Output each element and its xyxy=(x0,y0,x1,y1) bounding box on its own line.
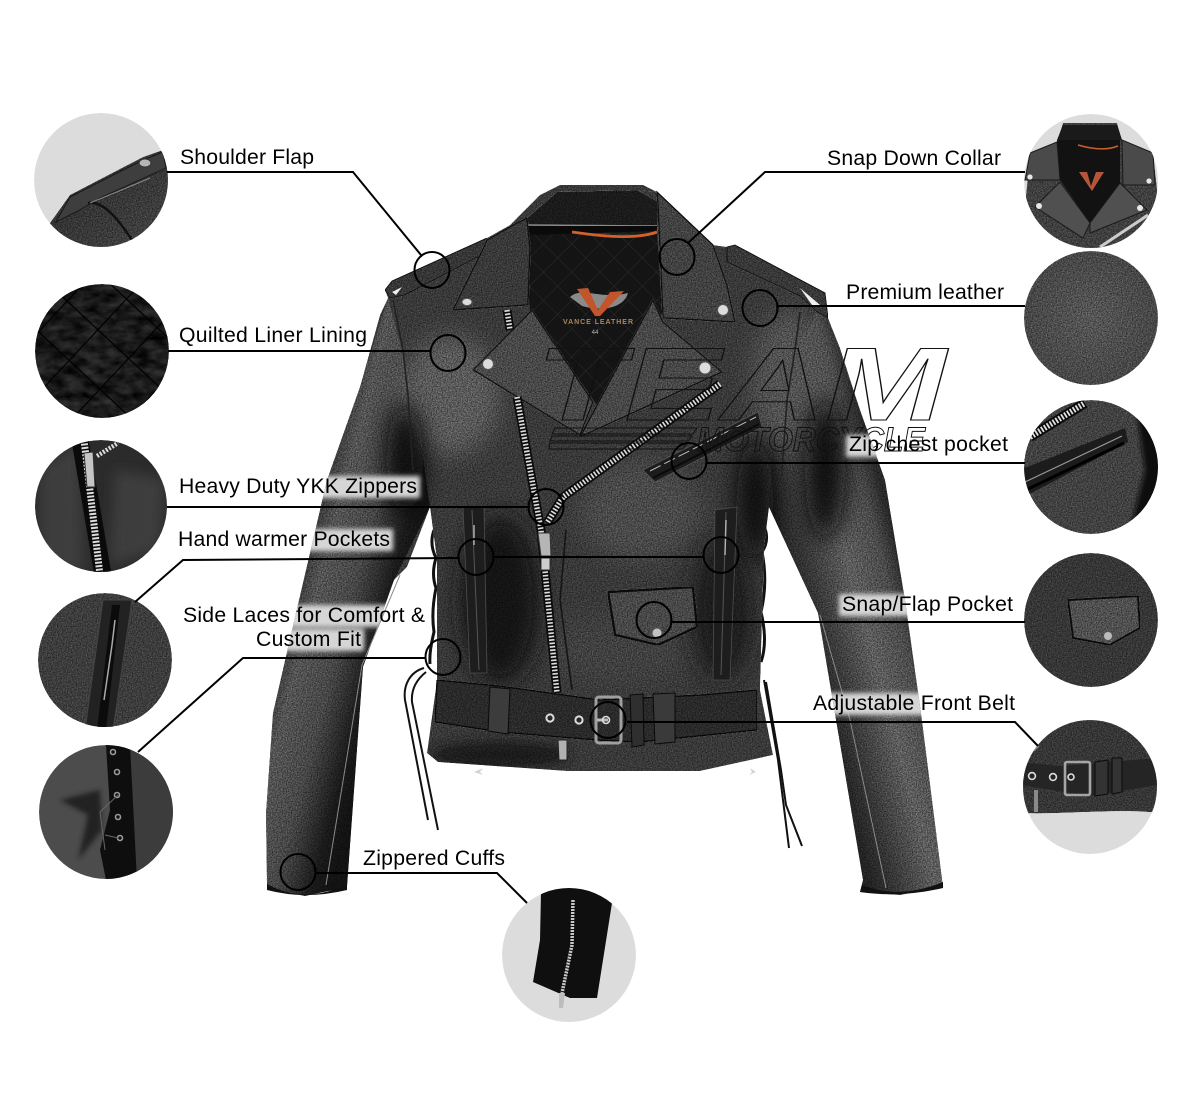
label: Snap/Flap Pocket: Snap/Flap Pocket xyxy=(842,593,1013,616)
label: Hand warmer Pockets: Hand warmer Pockets xyxy=(178,528,390,551)
leader line: front belt xyxy=(627,722,1038,746)
leader line: quilted liner xyxy=(168,350,430,352)
leader line: premium leather xyxy=(777,305,1025,307)
label halos over the jacket xyxy=(286,431,922,719)
brand logo: 44 xyxy=(592,330,599,336)
label: Shoulder Flap: Shoulder Flap xyxy=(180,146,314,169)
orange stripe xyxy=(572,232,657,237)
label: Snap Down Collar: Snap Down Collar xyxy=(827,147,1001,170)
label: Quilted Liner Lining: Quilted Liner Lining xyxy=(179,324,367,347)
label: Zip chest pocket: Zip chest pocket xyxy=(849,433,1008,456)
watermark: TEAM MOTORCYCLE xyxy=(536,327,949,459)
collar snaps xyxy=(462,298,728,374)
sleeve cuffs xyxy=(267,882,943,895)
leader line: shoulder flap xyxy=(167,172,421,255)
detail circle: snap flap pocket xyxy=(1024,553,1158,687)
front belt xyxy=(435,680,757,747)
leader line: snap flap pocket xyxy=(672,621,1025,623)
sleeve seams xyxy=(326,575,886,888)
label: Premium leather: Premium leather xyxy=(846,281,1004,304)
detail circle: snap down collar xyxy=(1024,114,1158,248)
label: Adjustable Front Belt: Adjustable Front Belt xyxy=(813,692,1015,715)
flap loop gaps xyxy=(392,287,820,305)
callout rings on the jacket xyxy=(280,239,778,890)
zip chest pocket xyxy=(643,412,762,482)
main zippers xyxy=(507,310,720,760)
detail circle: hand warmer pocket xyxy=(38,593,172,730)
jacket leather body and sleeves xyxy=(266,185,943,896)
label: Zippered Cuffs: Zippered Cuffs xyxy=(363,847,505,870)
watermark: TEAM MOTORCYCLE: TEAM xyxy=(536,327,949,443)
jacket lining and label xyxy=(523,190,662,405)
hem shadow marks xyxy=(474,768,756,775)
jacket illustration xyxy=(266,185,943,896)
leader line: zippered cuffs xyxy=(316,873,527,903)
detail circle: premium leather xyxy=(1024,251,1158,385)
label: Heavy Duty YKK Zippers: Heavy Duty YKK Zippers xyxy=(179,475,417,498)
label: Side Laces for Comfort and Custom Fit xyxy=(183,604,425,651)
detail circle: quilted liner xyxy=(35,284,169,418)
shoulder seams xyxy=(393,300,800,470)
watermark: TEAM MOTORCYCLE: MOTORCYCLE xyxy=(697,421,926,459)
hand warmer pockets xyxy=(463,507,737,680)
label: Side Laces for Comfort and Custom Fit: Custom Fit xyxy=(256,628,361,651)
detail circle: zip chest pocket xyxy=(1020,400,1165,534)
leader line: hand warmer pockets xyxy=(135,557,703,602)
detail circle: shoulder flap xyxy=(34,113,175,250)
leader line: zippers xyxy=(167,506,530,508)
brand logo xyxy=(563,288,633,336)
leader line: side laces xyxy=(138,658,425,752)
snap flap pocket xyxy=(608,587,697,645)
side lace strands xyxy=(405,526,802,848)
brand logo: VANCE LEATHER xyxy=(563,319,633,326)
leader line: snap down collar xyxy=(688,172,1025,243)
detail circle: zippered cuff xyxy=(502,885,636,1022)
detail circle: side laces xyxy=(39,745,175,880)
detail circle: adjustable belt xyxy=(1020,715,1160,854)
shoulder flaps xyxy=(385,238,828,318)
label: Side Laces for Comfort and Custom Fit: Side Laces for Comfort & xyxy=(183,604,425,627)
collar and lapels xyxy=(453,185,735,437)
detail circle: YKK zipper xyxy=(35,440,167,575)
leader line: zip chest pocket xyxy=(707,462,1025,464)
